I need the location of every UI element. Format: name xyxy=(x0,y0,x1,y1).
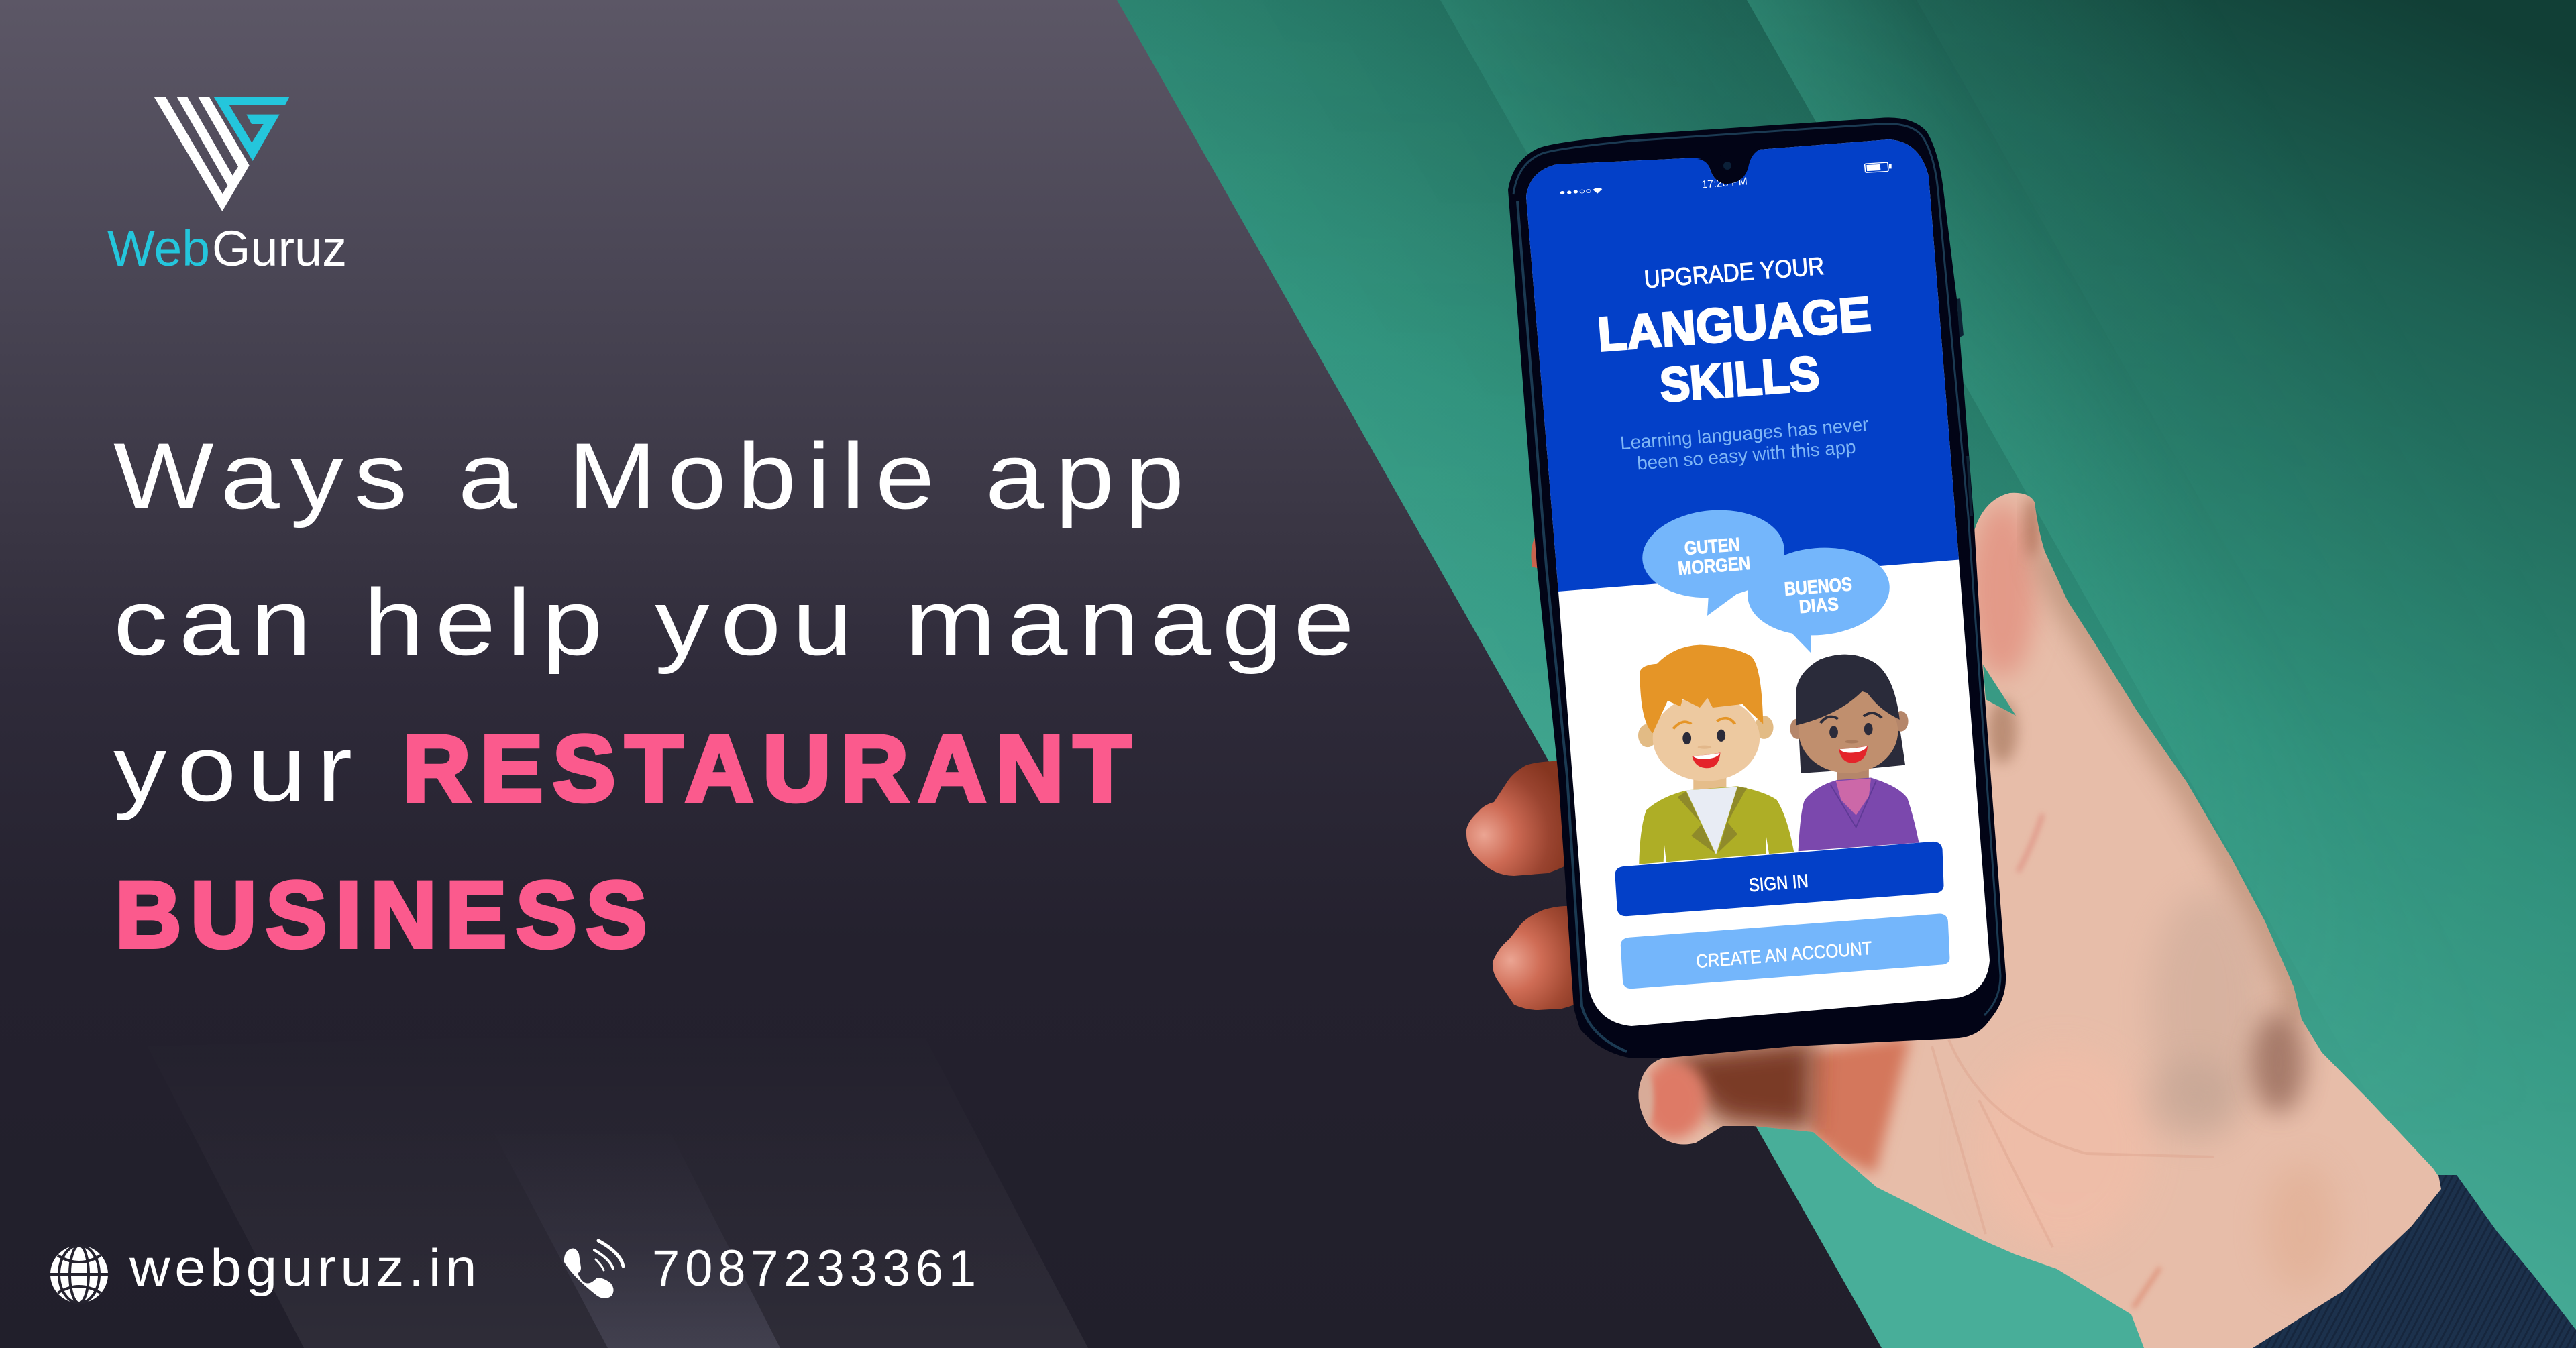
logo wordmark: Guruz: Guruz xyxy=(212,221,347,276)
telephone number: 7087233361 xyxy=(652,1240,981,1297)
hand: sleeve cuff xyxy=(2253,1175,2576,1348)
button: sign in: SIGN IN xyxy=(1748,870,1809,895)
illustration: woman xyxy=(1790,655,1919,851)
hand: palm and thumb xyxy=(1630,483,2462,1348)
phone notch xyxy=(1697,149,1761,184)
screen heading: language skills xyxy=(1596,288,1873,412)
background: dark diagonal panel xyxy=(0,0,1882,1348)
background: teal panel xyxy=(1073,0,2576,1348)
heading xyxy=(113,423,1365,967)
hand holding phone xyxy=(1466,483,2576,1348)
illustration: man xyxy=(1638,645,1794,864)
speech bubble: guten morgen xyxy=(1639,504,1788,616)
screen subtitle: been so easy with this app xyxy=(1636,437,1856,474)
status bar clock: 17:28 PM xyxy=(1701,176,1748,191)
screen heading: language skills: SKILLS xyxy=(1658,347,1821,412)
screen subtitle: Learning languages has never xyxy=(1619,414,1869,453)
speech bubble: guten morgen: MORGEN xyxy=(1677,553,1751,579)
heading: your xyxy=(113,716,363,821)
status bar xyxy=(1560,162,1892,194)
speech bubble: buenos dias: BUENOS xyxy=(1784,573,1853,600)
speech bubble: guten morgen: GUTEN xyxy=(1684,534,1741,559)
finger: upper xyxy=(1466,761,1570,876)
screen heading: upgrade your: UPGRADE YOUR xyxy=(1643,252,1825,293)
screen heading: language skills: LANGUAGE xyxy=(1596,288,1873,362)
button: create an account xyxy=(1621,914,1949,989)
website address: webguruz.in xyxy=(129,1238,481,1297)
icon: globe xyxy=(50,1245,108,1303)
finger: top tip behind phone xyxy=(1531,530,1543,570)
icon: telephone xyxy=(564,1241,623,1298)
logo wordmark: Web xyxy=(107,221,210,276)
logo: WebGuruz xyxy=(107,97,290,276)
heading: Ways a Mobile app xyxy=(113,423,1195,528)
heading: can help you manage xyxy=(113,569,1365,675)
hand: teal gap between thumb and palm xyxy=(1983,665,2016,716)
button: sign in xyxy=(1615,842,1944,916)
phone body xyxy=(1508,117,2006,1058)
finger: lower xyxy=(1493,906,1587,1010)
logo mark xyxy=(154,97,290,211)
speech bubble: buenos dias xyxy=(1744,542,1893,653)
phone screen xyxy=(1516,134,2006,1033)
button: create an account: CREATE AN ACCOUNT xyxy=(1695,938,1873,972)
screen subtitle xyxy=(1619,414,1869,474)
heading: BUSINESS xyxy=(115,862,656,967)
heading: RESTAURANT xyxy=(402,716,1140,821)
speech bubble: buenos dias: DIAS xyxy=(1799,594,1839,617)
